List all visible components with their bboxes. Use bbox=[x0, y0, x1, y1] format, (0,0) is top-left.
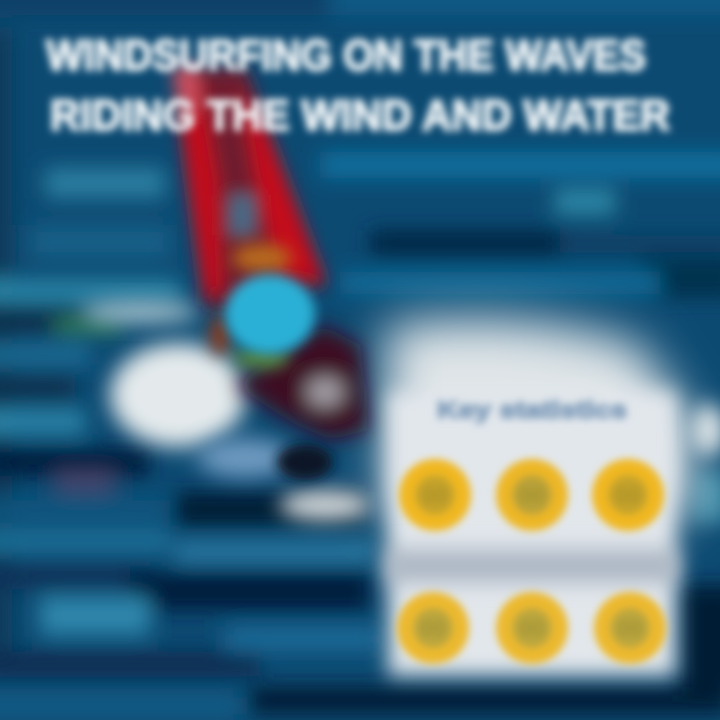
badge 4: 00 bbox=[421, 616, 445, 641]
sail: cyan circle bbox=[225, 274, 315, 354]
sail: orange and green trim bbox=[210, 244, 292, 368]
badge 6 bbox=[594, 592, 666, 664]
badge 5: 00 bbox=[520, 616, 544, 641]
sail: red panels over a dark base bbox=[172, 64, 328, 310]
badge 1 bbox=[399, 459, 471, 531]
foam: white water spray around the board bbox=[80, 301, 720, 521]
title line 1: WINDSURFING ON THE WAVES bbox=[46, 31, 646, 80]
badge 5 bbox=[496, 592, 568, 664]
panel: stats card bbox=[385, 392, 679, 676]
sailor and board bbox=[277, 444, 333, 480]
badge 3 bbox=[592, 459, 664, 531]
badge 1: 00 bbox=[423, 483, 447, 508]
badge 3: 00 bbox=[616, 483, 640, 508]
title line 2: RIDING THE WIND AND WATER bbox=[50, 91, 670, 140]
badge 4 bbox=[397, 592, 469, 664]
title: two blurred headline lines (wording illegible in reference) bbox=[46, 31, 670, 140]
badge 6: 00 bbox=[618, 616, 642, 641]
sail: dark maroon lower panel bbox=[235, 325, 368, 440]
badge 2 bbox=[496, 459, 568, 531]
panel heading: Key statistics bbox=[437, 397, 627, 424]
windsurfer: sail and board bbox=[172, 64, 368, 480]
badge 2: 00 bbox=[520, 483, 544, 508]
